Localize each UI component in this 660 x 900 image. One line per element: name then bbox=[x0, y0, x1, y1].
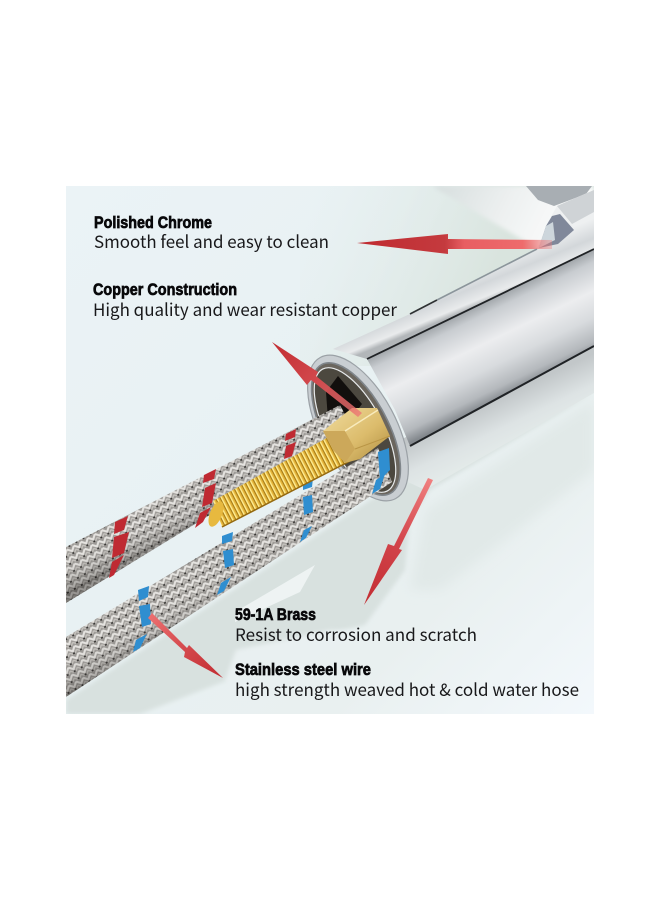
brass threaded screw bbox=[205, 435, 350, 529]
hot water hose bbox=[66, 405, 352, 603]
brass hex nut bbox=[323, 408, 390, 463]
faucet body bbox=[307, 190, 594, 502]
callout: polished chrome bbox=[94, 213, 329, 253]
faucet spout background bbox=[432, 186, 594, 250]
callout: copper construction: Copper Construction bbox=[93, 280, 237, 299]
callout: stainless steel wire bbox=[235, 660, 579, 701]
handle recess bbox=[539, 214, 574, 248]
callout: polished chrome: Smooth feel and easy to clean bbox=[94, 228, 329, 253]
main cylinder bbox=[367, 249, 594, 446]
chrome ring bbox=[307, 354, 409, 502]
callout: 59-1A brass: Resist to corrosion and scratch bbox=[235, 621, 477, 646]
callout: copper construction: High quality and wear resistant copper bbox=[93, 296, 397, 321]
arrow: copper construction bbox=[272, 342, 362, 417]
callout: 59-1A brass: 59-1A Brass bbox=[235, 605, 316, 624]
lower underside section bbox=[400, 345, 594, 490]
callout: polished chrome: Polished Chrome bbox=[94, 213, 212, 232]
product photo panel bbox=[66, 186, 594, 714]
callout: copper construction bbox=[93, 280, 397, 321]
callout: stainless steel wire: high strength weaved hot & cold water hose bbox=[235, 676, 579, 701]
upper chrome section bbox=[333, 190, 594, 359]
callout: 59-1A brass bbox=[235, 605, 477, 646]
arrow: stainless steel wire bbox=[148, 613, 223, 678]
callout: stainless steel wire: Stainless steel wire bbox=[235, 660, 371, 679]
arrow: 59-1A brass bbox=[364, 478, 433, 605]
cold water hose bbox=[66, 448, 392, 697]
countertop reflection bbox=[66, 393, 594, 714]
arrow: polished chrome bbox=[357, 234, 552, 254]
